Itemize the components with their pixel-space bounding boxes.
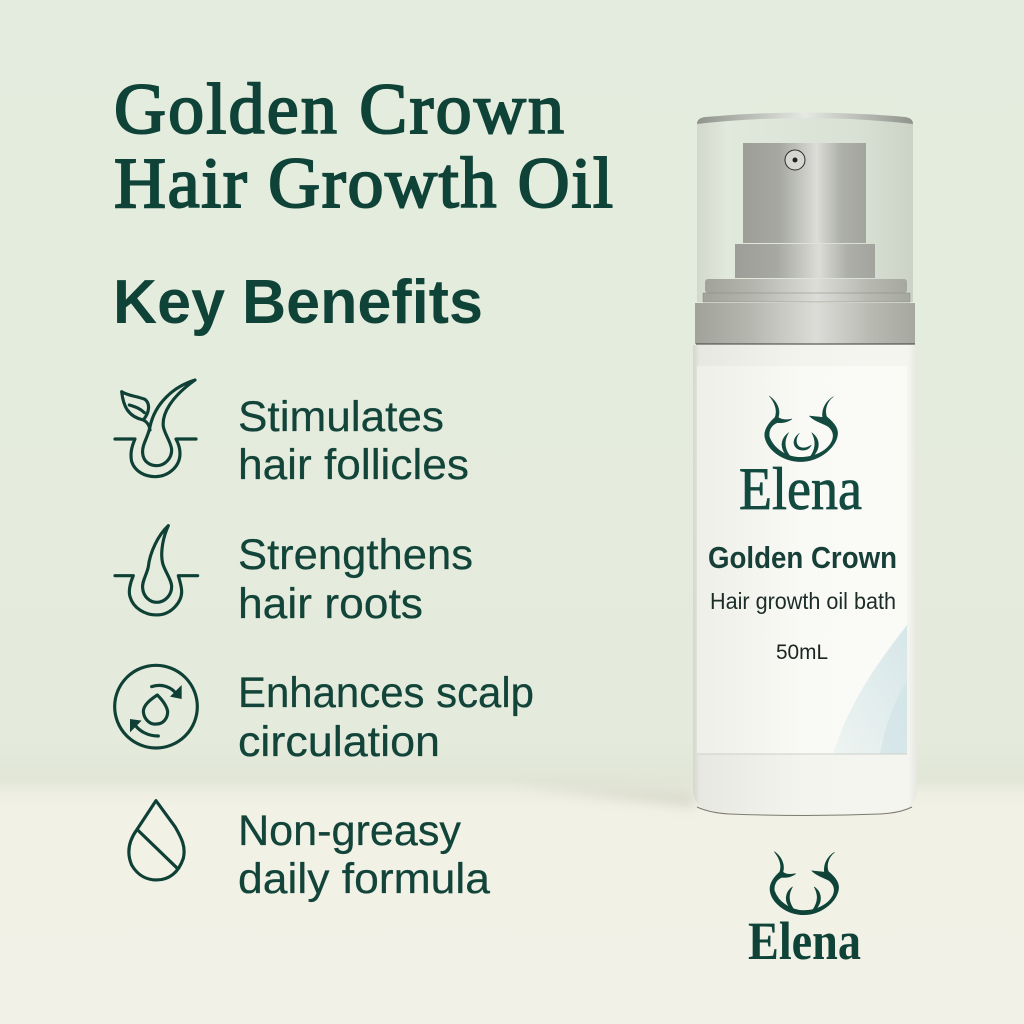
text: non-greasy daily formula: daily formula bbox=[238, 855, 490, 903]
text: non-greasy daily formula bbox=[238, 807, 490, 903]
text: stimulates hair follicles: Stimulates bbox=[238, 393, 444, 441]
heading: key benefits: Key Benefits bbox=[113, 268, 483, 337]
text: stimulates hair follicles bbox=[238, 393, 469, 489]
collar bbox=[695, 303, 915, 344]
brand name: Elena bbox=[748, 911, 861, 971]
cap rim bbox=[697, 112, 913, 124]
text: enhances scalp circulation: circulation bbox=[238, 718, 440, 766]
benefit 2: strengthens hair roots bbox=[115, 526, 473, 628]
pump step bbox=[735, 244, 875, 278]
label product name: Golden Crown bbox=[708, 540, 897, 575]
title: Hair Growth Oil bbox=[114, 143, 613, 223]
text: enhances scalp circulation bbox=[238, 669, 534, 766]
product label bbox=[697, 366, 907, 754]
label logo bbox=[765, 396, 838, 462]
logo mark: antlers bbox=[770, 852, 839, 915]
text: non-greasy daily formula: Non-greasy bbox=[238, 807, 462, 855]
icon: slashed drop bbox=[129, 801, 184, 880]
bottle shadow bbox=[520, 785, 695, 808]
title: Golden Crown bbox=[114, 69, 564, 149]
label descriptor: Hair growth oil bath bbox=[710, 588, 896, 614]
nozzle bbox=[785, 150, 805, 170]
benefit 4: non-greasy daily formula bbox=[129, 801, 490, 903]
benefit 3: enhances scalp circulation bbox=[115, 665, 534, 766]
text: enhances scalp circulation: Enhances scalp bbox=[238, 669, 534, 717]
title bbox=[114, 69, 613, 223]
text: strengthens hair roots bbox=[238, 531, 473, 628]
bottle bbox=[520, 112, 917, 816]
icon: follicle with leaf bbox=[115, 380, 196, 477]
benefit 1: stimulates hair follicles bbox=[115, 380, 469, 489]
pump base bbox=[705, 279, 907, 293]
label volume: 50mL bbox=[776, 641, 828, 664]
text: strengthens hair roots: hair roots bbox=[238, 580, 423, 628]
pump head bbox=[743, 143, 866, 243]
text: strengthens hair roots: Strengthens bbox=[238, 531, 473, 579]
icon: circulation circle bbox=[115, 665, 197, 748]
text: stimulates hair follicles: hair follicles bbox=[238, 441, 469, 489]
clear cap bbox=[697, 116, 913, 302]
bottle body bbox=[693, 345, 917, 814]
icon: hair root drop bbox=[115, 526, 198, 615]
bottom logo bbox=[748, 852, 861, 971]
label brand name: Elena bbox=[739, 456, 862, 522]
